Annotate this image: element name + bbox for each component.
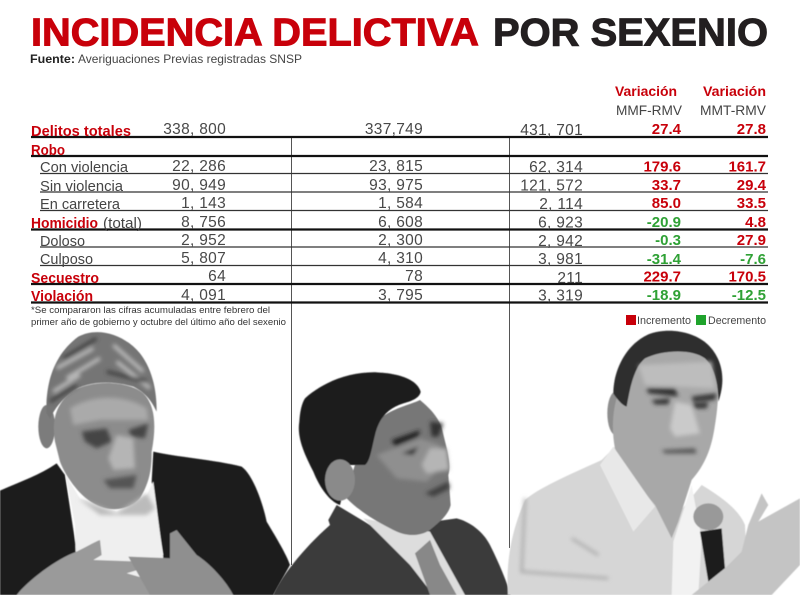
footnote: primer año de gobierno y octubre del último año del sexenio	[31, 317, 286, 328]
row: Secuestro: Secuestro	[31, 271, 99, 287]
row: Homicidio (total): (total)	[103, 215, 142, 232]
row: Con violencia: 62, 314	[529, 159, 583, 176]
row: Secuestro: 229.7	[643, 268, 681, 286]
footnote: *Se compararon las cifras acumuladas entre febrero del	[31, 305, 270, 316]
row: Con violencia: 23, 815	[369, 158, 423, 175]
row: Homicidio (total): 6, 608	[378, 214, 423, 231]
row: En carretera	[40, 195, 766, 213]
photo: second governor, centre	[273, 372, 511, 595]
title	[31, 12, 768, 54]
row: Con violencia: Con violencia	[40, 159, 129, 176]
legend: Decremento	[708, 315, 766, 327]
row: Culposo: 5, 807	[181, 250, 226, 267]
row: En carretera: 2, 114	[539, 196, 583, 213]
row: Delitos totales: 431, 701	[520, 122, 583, 139]
legend	[626, 315, 766, 327]
row: Violación: -12.5	[732, 287, 766, 304]
row: Sin violencia: 93, 975	[369, 177, 423, 194]
row: Doloso: 2, 942	[538, 233, 583, 250]
photo: first governor, left	[0, 332, 290, 595]
row: En carretera: En carretera	[40, 196, 121, 213]
row: Violación: 3, 319	[538, 288, 583, 304]
row: Homicidio (total): 8, 756	[181, 214, 226, 231]
row: En carretera: 1, 143	[181, 195, 226, 212]
row: Sin violencia	[40, 177, 767, 195]
row: Delitos totales: 337,749	[365, 121, 423, 138]
footnote	[31, 305, 286, 328]
row: Con violencia: 22, 286	[172, 158, 226, 175]
table column dividers	[292, 137, 510, 565]
row: Delitos totales: 338, 800	[163, 121, 226, 138]
row: Sin violencia: Sin violencia	[40, 178, 124, 195]
table row rules	[31, 137, 768, 302]
title: POR SEXENIO	[493, 12, 768, 54]
row: Secuestro: 170.5	[728, 268, 766, 286]
row: Secuestro: 211	[557, 270, 583, 287]
row: Violación	[31, 287, 766, 305]
row: En carretera: 85.0	[652, 195, 681, 212]
column headers: variation: Variación	[615, 83, 677, 99]
row: Delitos totales	[31, 121, 766, 140]
row: Violación: Violación	[31, 289, 93, 305]
row: Doloso: -0.3	[655, 232, 681, 249]
row: Doloso: 27.9	[737, 232, 766, 249]
row: Secuestro	[31, 268, 766, 287]
row: Con violencia: 161.7	[728, 158, 766, 176]
row: Culposo	[40, 250, 766, 268]
row: Culposo: Culposo	[40, 251, 93, 268]
row: Homicidio (total): 6, 923	[538, 214, 583, 232]
row: Sin violencia: 90, 949	[172, 177, 226, 194]
row: Culposo: -31.4	[647, 251, 682, 268]
source line: Fuente:	[30, 52, 75, 66]
row: Doloso: Doloso	[40, 233, 85, 250]
row: Homicidio (total): 4.8	[745, 214, 766, 231]
column headers: variation	[615, 83, 767, 118]
row: En carretera: 33.5	[737, 195, 766, 212]
row: Con violencia	[40, 158, 766, 176]
photo: third governor, right	[507, 331, 800, 595]
row: Secuestro: 78	[405, 268, 423, 285]
row: Sin violencia: 33.7	[652, 177, 681, 194]
row: Doloso: 2, 952	[181, 232, 226, 249]
row: Homicidio (total)	[31, 214, 766, 232]
row: Robo: Robo	[31, 143, 65, 159]
source line: Averiguaciones Previas registradas SNSP	[78, 52, 302, 66]
row: Violación: 3, 795	[378, 287, 423, 304]
row: Doloso: 2, 300	[378, 232, 423, 249]
row: Violación: 4, 091	[181, 287, 226, 304]
legend: Incremento	[637, 315, 691, 327]
row: Secuestro: 64	[208, 268, 226, 285]
column headers: variation: MMT-RMV	[700, 102, 767, 118]
row: Homicidio (total): Homicidio	[31, 216, 98, 232]
row: Doloso	[40, 232, 766, 250]
row: En carretera: 1, 584	[378, 195, 423, 212]
title: INCIDENCIA DELICTIVA	[31, 12, 479, 54]
column headers: variation: MMF-RMV	[616, 102, 683, 118]
row: Sin violencia: 121, 572	[520, 178, 583, 194]
row: Sin violencia: 29.4	[737, 177, 767, 194]
row: Culposo: 4, 310	[378, 250, 423, 267]
row: Violación: -18.9	[647, 287, 681, 304]
row: Delitos totales: 27.4	[652, 121, 682, 138]
row: Culposo: 3, 981	[538, 251, 583, 268]
row: Delitos totales: Delitos totales	[31, 124, 131, 140]
row: Con violencia: 179.6	[643, 158, 681, 176]
row: Homicidio (total): -20.9	[647, 214, 681, 231]
row: Culposo: -7.6	[740, 251, 766, 268]
column headers: variation: Variación	[703, 83, 766, 99]
row: Delitos totales: 27.8	[737, 121, 766, 138]
